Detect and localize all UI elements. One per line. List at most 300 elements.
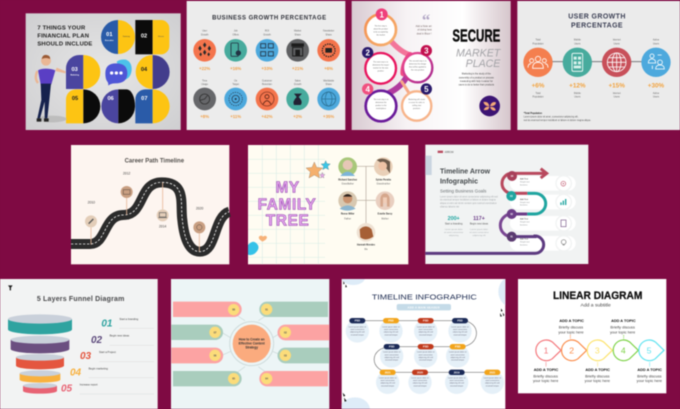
title: my family tree: FAMILY <box>258 196 316 213</box>
step text: Add Text <box>520 198 528 201</box>
timeline copy <box>349 325 502 387</box>
person: father <box>338 191 357 220</box>
icons <box>561 181 566 245</box>
metric: market share: Share <box>295 33 301 36</box>
step text: business <box>520 244 528 246</box>
arrow road <box>425 169 547 253</box>
person: me <box>357 223 376 251</box>
timeline copy: adipiscing elit sed <box>453 331 467 334</box>
timeline copy: eiusmod tempor <box>450 384 464 387</box>
step 2: market for the new <box>373 66 389 69</box>
topic 3: Briefly discuss <box>585 374 610 378</box>
topic 2: your topic here <box>558 330 584 334</box>
metric: market share <box>286 30 309 71</box>
step badges <box>506 171 517 242</box>
metric: customer retention: +42% <box>261 114 273 119</box>
item 04 <box>136 55 170 89</box>
step text: Simple text <box>520 241 530 244</box>
metric: active users: Users <box>653 42 660 45</box>
quote <box>416 11 432 35</box>
timeline copy: eiusmod tempor <box>413 384 427 387</box>
metric: newsletter share: Share <box>326 33 332 36</box>
step text: Add Text <box>520 178 528 181</box>
step badges: 01 <box>510 237 514 239</box>
metric: on target: Target <box>232 83 239 86</box>
metric: newsletter share <box>317 30 340 71</box>
topic 4 <box>610 319 636 339</box>
timeline copy: amet consectetur <box>413 379 427 382</box>
timeline copy: adipiscing elit sed <box>380 382 395 385</box>
item 01 <box>101 20 135 54</box>
step 3: that will be applied to <box>409 66 426 69</box>
funnel layer 5 <box>23 383 57 394</box>
step 4: product in the <box>375 104 387 107</box>
funnel layer 3 <box>16 354 64 369</box>
metric: sales growth: Growth <box>294 83 302 86</box>
step text: Simple text <box>520 221 530 224</box>
person: father: Reese Miller <box>341 214 355 216</box>
funnel labels: 01 <box>101 318 113 329</box>
icon: funnel <box>8 285 13 290</box>
step badges: 04 <box>511 175 514 178</box>
timeline copy: Lorem ipsum dolor sit <box>448 376 466 379</box>
timeline copy: eiusmod tempor <box>384 333 398 336</box>
metric: internet users: Internet <box>613 92 621 95</box>
topic 5: ADD A TOPIC <box>637 368 662 372</box>
tree lines <box>357 166 376 225</box>
timeline pills: PSD <box>423 345 428 349</box>
item 07: 07 <box>141 96 147 102</box>
icon circles <box>556 176 571 251</box>
step 2: The next step is to <box>373 60 388 63</box>
title: timeline infographic: TIMELINE INFOGRAPHIC <box>372 292 477 301</box>
person: grandmother <box>374 157 393 186</box>
metric: roi growth: ROI <box>265 31 269 33</box>
title: market place: PLACE <box>466 58 501 70</box>
timeline copy: amet consectetur <box>385 353 399 356</box>
body text: Marketing is the study of the <box>462 73 492 76</box>
person: grandfather: Grandfather <box>341 183 354 186</box>
title: timeline arrow: Infographic <box>440 179 478 186</box>
item 07 <box>135 89 170 123</box>
bar 05 <box>173 371 242 386</box>
metric: user growth <box>193 30 216 71</box>
item 01: Executive <box>105 39 114 42</box>
topic 2: ADD A TOPIC <box>559 319 584 323</box>
timeline copy: adipiscing elit sed <box>384 331 398 334</box>
item 02: Mission <box>158 36 164 38</box>
metric: user growth: +22% <box>199 66 210 71</box>
person: grandfather <box>338 157 358 186</box>
step 3: determine the design <box>409 63 426 66</box>
funnel text: Increase report <box>80 382 98 386</box>
timeline pills: PSD <box>389 345 394 349</box>
timeline copy: amet consectetur <box>419 328 433 331</box>
paragraph: ullamco laboris nisi <box>440 205 460 208</box>
teardrop 1: 1 <box>544 346 549 356</box>
metric: active users: +30% <box>648 83 665 90</box>
topic 1 <box>533 362 558 383</box>
center hub <box>230 322 274 366</box>
step text: Simple text <box>520 181 530 184</box>
item 03 <box>66 55 100 89</box>
timeline copy: eiusmod tempor <box>351 333 364 336</box>
metric: internet users: Users <box>614 42 621 45</box>
quote: Add a Note art <box>416 25 432 28</box>
metric: active users: Active <box>653 92 660 95</box>
icon: hearts <box>248 236 267 255</box>
bar 03 <box>277 348 329 363</box>
person: mother: Mother <box>381 217 389 220</box>
metric: on target <box>224 80 247 119</box>
timeline copy: adipiscing elit sed <box>418 356 433 359</box>
metric: sales growth: Sales <box>295 80 301 82</box>
stat: 200+: sit amet consectetur <box>444 231 464 234</box>
metric: user growth: Growth <box>201 33 209 36</box>
metric: sales growth <box>286 80 309 119</box>
step 1: to be accepted by <box>373 30 388 33</box>
topic 5: Briefly discuss <box>637 374 662 378</box>
step text: Add Text <box>520 238 528 241</box>
panel: business growth percentage <box>187 1 345 130</box>
metric: mobile users <box>563 40 592 99</box>
timeline copy: adipiscing elit sed <box>384 356 399 359</box>
metric: time usage <box>193 80 216 119</box>
metric: time usage: Usage <box>201 84 209 86</box>
bar 08 <box>173 302 242 317</box>
step 1: The first step is <box>374 24 387 27</box>
timeline copy: Lorem ipsum dolor sit <box>411 376 429 379</box>
metric: total population: Total <box>536 39 541 42</box>
panel: my family tree <box>248 145 408 264</box>
person: grandfather: Richard Sanchez <box>338 180 358 182</box>
step 5: Marketing will create <box>408 98 425 101</box>
step 4: determine the <box>375 101 387 104</box>
metric: worldwide share: +35% <box>323 114 334 119</box>
panel: career path timeline <box>71 145 229 264</box>
stat: 200+ <box>444 216 464 237</box>
metric: job offers: Offers <box>233 33 240 36</box>
title: my family tree: TREE <box>266 212 309 229</box>
timeline copy: Lorem ipsum dolor sit <box>379 376 397 379</box>
metric: customer retention: Customer <box>262 79 272 82</box>
header pill <box>397 304 451 310</box>
metric: active users: Active <box>653 39 660 42</box>
stat: 117+: sit amet consectetur <box>469 231 489 234</box>
topic 2: Briefly discuss <box>559 326 583 330</box>
subtitle: Add a subtitle <box>581 302 611 308</box>
funnel text: Begin marketing <box>89 366 108 370</box>
title: funnel: 5 Layers Funnel Diagram <box>37 296 125 303</box>
title: career path: Career Path Timeline <box>125 158 185 164</box>
metric: worldwide share: Share <box>326 83 332 86</box>
topic 1: Briefly discuss <box>533 374 558 378</box>
stat: 200+: Lorem ipsum dolor <box>445 228 463 231</box>
stat: 117+ <box>469 216 489 237</box>
metric: active users: Users <box>653 96 660 99</box>
topic 3: your topic here <box>585 379 610 383</box>
paragraph: Lorem ipsum dolor sit amet consectetur adipiscing elit sed <box>440 195 499 198</box>
stat: 200+: 200+ <box>448 216 460 222</box>
metric: total population: Population <box>532 42 544 45</box>
timeline copy: Lorem ipsum dolor sit <box>417 351 435 354</box>
icon: logo <box>479 96 500 116</box>
panel: financial plan <box>26 13 181 130</box>
footnote: sed do eiusmod tempor incididunt ut labore et dolore magna aliqua. <box>524 119 591 122</box>
timeline pills: PSD <box>423 319 428 323</box>
metric: market share: Market <box>294 30 302 33</box>
bar 08: 08 <box>232 309 236 312</box>
metric: internet users <box>602 39 631 99</box>
teardrop 4: 4 <box>621 346 626 356</box>
timeline copy: amet consectetur <box>450 379 464 382</box>
step 5: a cause for sales in <box>409 102 425 104</box>
road <box>71 182 229 252</box>
timeline pills: 2020 <box>417 370 423 374</box>
topic 1: ADD A TOPIC <box>534 368 558 372</box>
timeline copy: adipiscing elit sed <box>350 331 365 334</box>
timeline pills: PSD <box>455 345 460 349</box>
timeline pills <box>349 318 500 375</box>
body text: ownership of a product or process <box>459 76 495 79</box>
icon: 3D character <box>36 55 67 122</box>
milestone 2012 <box>121 171 133 215</box>
bar 02: 02 <box>284 331 287 334</box>
person: grandmother: Grandmother <box>376 183 390 186</box>
timeline copy: amet consectetur <box>485 379 500 382</box>
metric: total population <box>523 39 553 99</box>
panel: user growth percentage <box>517 1 680 130</box>
stat: 117+: 117+ <box>473 216 485 222</box>
item 05 <box>66 89 100 123</box>
timeline copy: Lorem ipsum dolor sit <box>382 325 400 328</box>
timeline copy: amet consectetur <box>384 328 398 331</box>
funnel labels: 04 <box>70 367 82 378</box>
stat: 117+: Begin new ideas <box>470 223 489 226</box>
step 4: 4 <box>365 85 370 94</box>
timeline copy: Lorem ipsum dolor sit <box>451 325 469 328</box>
topic 2 <box>558 319 584 339</box>
metric: internet users: Users <box>614 96 621 99</box>
center hub: Strategy <box>245 346 258 350</box>
person: grandmother: Sylvie Peralta <box>376 179 392 182</box>
metric: newsletter share: Newsletter <box>323 30 334 33</box>
bar 07 <box>171 325 223 340</box>
step 5: 5 <box>424 85 429 94</box>
item 06 <box>101 89 135 123</box>
title: secure: SECURE <box>452 26 500 46</box>
timeline copy: eiusmod tempor <box>453 333 467 336</box>
metric: roi growth: Growth <box>263 33 271 36</box>
timeline copy: eiusmod tempor <box>381 384 395 387</box>
bar 05: 05 <box>232 378 236 381</box>
bar 02 <box>277 325 329 340</box>
timeline pills: 2021 <box>385 370 391 374</box>
timeline copy: eiusmod tempor <box>486 384 499 387</box>
step 2 <box>362 47 396 84</box>
decorative blobs <box>341 278 506 409</box>
topic 3 <box>585 362 610 383</box>
title: my family tree: MY <box>276 180 300 197</box>
timeline copy: amet consectetur <box>453 328 467 331</box>
step 2: 2 <box>365 49 370 58</box>
step 4: marketplace <box>376 107 386 110</box>
step 4 <box>362 83 396 121</box>
topic 4: your topic here <box>610 330 635 334</box>
bar 06 <box>171 348 223 363</box>
timeline copy: amet consectetur <box>419 353 433 356</box>
metric: newsletter share: +6% <box>324 66 333 71</box>
title: timeline arrow: Timeline Arrow <box>440 168 491 175</box>
step 3: 3 <box>424 47 429 56</box>
funnel labels: 02 <box>91 335 103 346</box>
timeline copy: adipiscing elit sed <box>485 382 500 385</box>
title: market place: MARKET <box>456 47 501 59</box>
timeline copy: Lorem ipsum dolor sit <box>349 325 367 328</box>
teardrop 2 <box>562 340 587 361</box>
title: linear diagram: LINEAR DIAGRAM <box>553 290 642 302</box>
icon: chat bubbles <box>105 60 132 86</box>
metric: job offers: +16% <box>230 66 241 71</box>
timeline pills: PSD <box>355 319 360 323</box>
title: 7 things: 7 THINGS YOUR <box>37 25 86 31</box>
metric: job offers <box>224 31 247 71</box>
metric: internet users: Internet <box>613 39 621 42</box>
timeline pills: PSD <box>457 319 463 323</box>
title: 7 things: SHOULD INCLUDE <box>37 42 93 48</box>
metric: user growth: User <box>202 30 207 33</box>
metric: mobile users: Users <box>574 42 581 45</box>
teardrop 5 <box>639 340 664 361</box>
teardrop 3 <box>587 340 612 361</box>
logo: ARROW <box>445 151 454 154</box>
milestone 2010: 2010 <box>88 201 95 205</box>
bar 07: 07 <box>214 331 217 334</box>
milestone 2020: 2020 <box>196 206 204 210</box>
stat: 200+: adipiscing <box>449 235 459 237</box>
item 04: 04 <box>141 67 148 73</box>
milestone 2014 <box>157 182 169 229</box>
milestone 2010 <box>85 201 97 245</box>
item 05: 05 <box>72 96 78 102</box>
timeline copy: eiusmod tempor <box>419 359 433 362</box>
connector body <box>388 40 410 95</box>
item 03: Marketing <box>70 74 79 77</box>
stat: 117+: adipiscing elit <box>473 234 486 237</box>
panel: secure market place <box>352 1 511 130</box>
metric: total population: +6% <box>532 83 545 90</box>
funnel labels: 05 <box>61 384 73 395</box>
metric: total population: Population <box>532 96 544 99</box>
topic 5: your topic here <box>637 379 662 383</box>
panel: timeline infographic <box>340 278 506 409</box>
step text: Add Text <box>520 218 528 221</box>
funnel text: Start a Project <box>99 350 116 354</box>
person: mother: Estelle Darcy <box>378 213 393 216</box>
step 5: selling new <box>412 105 422 107</box>
funnel text: Begin new ideas <box>110 334 130 338</box>
timeline pills: PSD <box>388 319 394 323</box>
topic 5 <box>637 362 662 383</box>
metric: active users <box>641 39 671 99</box>
metric: on target: +11% <box>230 114 241 119</box>
metric: roi growth <box>256 31 278 71</box>
step 3 <box>403 45 432 82</box>
step 1: 1 <box>379 10 384 19</box>
milestone 2012: 2012 <box>123 171 131 175</box>
timeline copy: eiusmod tempor <box>451 359 465 362</box>
quote: “ <box>422 11 430 30</box>
step 1 <box>365 8 396 45</box>
metric: worldwide share <box>317 79 340 119</box>
metric: job offers: Job <box>234 31 238 33</box>
step 3: the new product <box>411 69 425 72</box>
timeline copy: Lorem ipsum dolor sit <box>484 376 502 379</box>
milestone 2020 <box>193 206 205 252</box>
step badges: 02 <box>510 214 514 216</box>
metric: customer retention: Retention <box>262 83 273 86</box>
step text <box>520 178 530 246</box>
funnel layer 1 <box>8 314 72 334</box>
teardrop 3: 3 <box>595 346 600 356</box>
funnel layer 4 <box>20 370 60 383</box>
step text: Simple text <box>520 201 530 204</box>
metric: internet users: +15% <box>608 83 625 90</box>
body text: measuring with help it easier for <box>460 80 493 83</box>
funnel labels: 03 <box>80 351 92 362</box>
step 5 <box>402 83 432 121</box>
step text: business <box>520 184 528 186</box>
accent block <box>425 156 432 175</box>
timeline copy: eiusmod tempor <box>385 359 399 362</box>
panel: timeline arrow infographic <box>425 145 588 264</box>
timeline pills: 2021 <box>489 370 496 374</box>
title: 7 things: FINANCIAL PLAN <box>37 33 89 39</box>
icon: stars <box>306 161 330 178</box>
metric: time usage: Time <box>202 80 208 82</box>
step 2: determine the target <box>372 63 389 66</box>
panel: linear diagram <box>518 279 666 393</box>
step text: business <box>520 224 528 226</box>
white rows <box>510 176 576 251</box>
timeline copy: amet consectetur <box>451 353 465 356</box>
step 2: product <box>378 69 384 72</box>
step badges: 03 <box>510 196 513 198</box>
bar 04 <box>259 371 328 386</box>
timeline pills: 2019 <box>454 370 460 374</box>
timeline line <box>355 321 492 372</box>
step 3: The second step is to <box>409 60 426 63</box>
step 4: The next step is to <box>374 98 388 101</box>
item 06: 06 <box>108 96 114 102</box>
teardrop 5: 5 <box>647 346 652 356</box>
timeline copy: amet consectetur <box>381 379 395 382</box>
metric: total population: Total <box>536 92 541 95</box>
funnel text: Start a branding <box>119 317 139 321</box>
logo <box>438 151 454 154</box>
teardrop 4 <box>613 340 638 361</box>
funnel layer 2 <box>11 336 69 353</box>
body text: users to do to better their products <box>459 84 495 87</box>
grid paper <box>248 145 325 264</box>
step 1: about the product <box>374 27 388 30</box>
stat: 117+: Lorem ipsum dolor <box>470 228 488 231</box>
bar 04: 04 <box>265 378 269 381</box>
item 01: Summary <box>123 36 130 38</box>
footnote: *Total Population <box>524 112 543 115</box>
topic 4: Briefly discuss <box>610 326 635 330</box>
metric: mobile users: Mobile <box>574 93 581 95</box>
